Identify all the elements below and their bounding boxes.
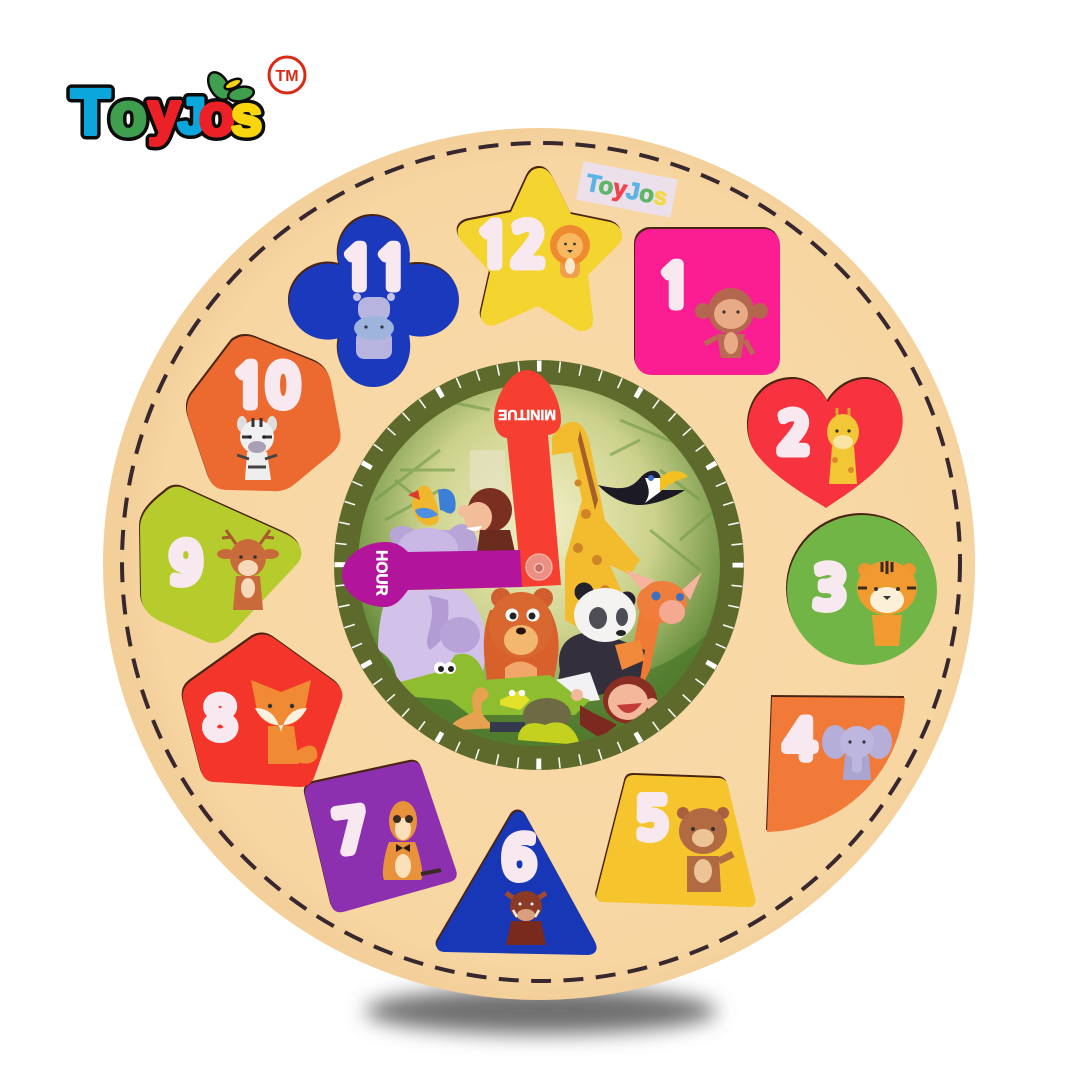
piece 10: orange hexagon with zebra [187,336,341,491]
lion [550,225,590,278]
number 5: 5 [636,794,668,847]
dial tick marks [340,366,738,764]
frog and turtle [490,690,580,745]
piece 5: yellow trapezoid with bear [596,775,756,907]
deer [625,570,702,690]
bear [484,588,559,690]
monkey and parrot [408,486,515,552]
illustration: Toyjos wooden shape clock product image [66,56,975,1050]
hour label: HOUR [372,550,390,596]
crocodile [400,654,590,715]
piece 6: blue triangle with boar [437,812,597,955]
number 9: 9 [170,539,202,592]
elephant [378,524,486,695]
number 12: 12 [476,217,546,275]
clock dial [334,360,744,770]
snake [452,687,490,730]
number 8: 8 [204,694,236,747]
logo trademark badge [269,57,305,93]
giraffe [827,408,859,484]
hippo [353,293,395,359]
logo wordmark fill: J [178,88,206,144]
piece 1: pink square with monkey [635,229,780,375]
logo wordmark outline: T [71,76,110,148]
bamboo leaves [375,385,715,570]
toucan [598,471,688,505]
logo leaves [204,69,255,104]
deer [217,530,279,610]
boar [506,891,546,945]
small Toyjos sticker [576,161,678,218]
logo wordmark outline: y [148,81,180,146]
wooden clock board [103,128,975,1000]
piece 11: blue clover with hippo [289,216,459,387]
piece 7: purple square with meerkat [305,762,457,912]
piece 8: red pentagon with fox [183,634,342,787]
piece 12: yellow star with lion [458,168,622,331]
piece 4: orange quarter circle with elephant [767,697,905,832]
number 10: 10 [232,360,300,415]
logo wordmark fill: y [148,81,180,146]
number 3: 3 [813,562,847,617]
piece 3: green circle with tiger [787,515,937,665]
logo wordmark fill [71,76,262,148]
logo wordmark outline: o [199,83,234,148]
fox [251,680,317,764]
jungle scene [374,388,712,746]
floor shadow [365,988,717,1034]
zebra [237,416,277,480]
logo wordmark outline: o [110,81,147,148]
meerkat [383,801,441,880]
monkey [695,288,768,358]
number 1: 1 [658,260,692,315]
bear [677,807,733,892]
logo trademark badge: TM [275,68,299,85]
logo: Toyjos [71,69,262,148]
clock pivot [526,554,552,580]
giraffe [552,422,640,640]
elephant [822,725,892,780]
hour hand [342,542,522,607]
small Toyjos sticker: ToyJos [584,169,670,212]
ground [384,636,706,746]
laughing monkey [571,676,658,738]
logo wordmark outline: s [231,84,262,147]
piece 9: lime shape with deer [140,487,301,643]
logo wordmark outline: J [178,88,206,144]
number 2: 2 [778,409,810,462]
tiger [857,561,917,646]
minute label: MINITUE [498,406,556,422]
number 7: 7 [331,803,372,862]
panda [555,582,645,705]
number 6: 6 [502,832,536,887]
logo wordmark fill: T [71,76,110,148]
piece 2: red heart with giraffe [748,379,903,508]
logo wordmark fill: s [231,84,262,147]
logo wordmark fill: o [110,81,147,148]
logo wordmark outline [71,76,262,148]
number 11: 11 [341,242,409,297]
logo wordmark fill: o [199,83,234,148]
minute hand [494,370,561,587]
number 4: 4 [784,714,816,766]
